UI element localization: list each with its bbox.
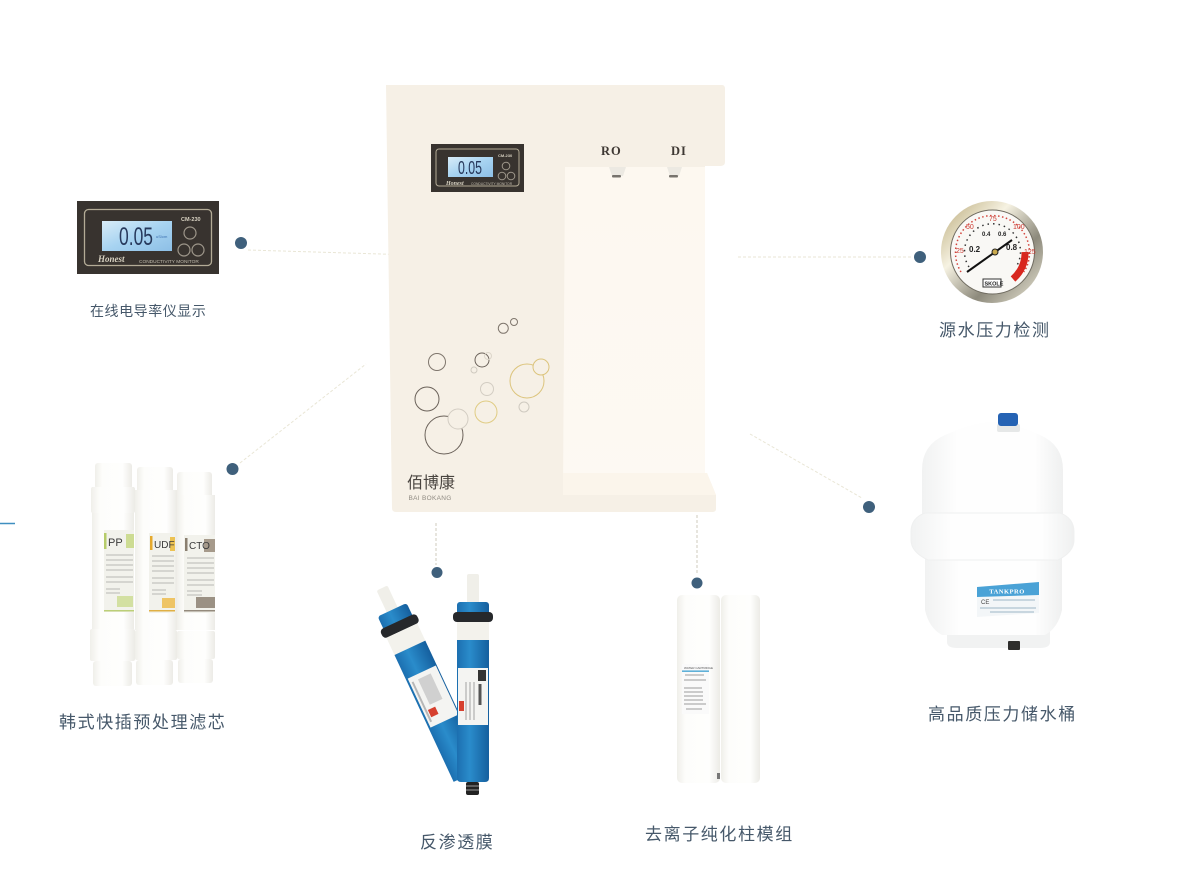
built-in conductivity monitor: 0.05 — [458, 158, 482, 178]
scale numbers: 0.8 — [1006, 243, 1018, 252]
outlet fitting — [1008, 641, 1020, 650]
RO outlet label: RO — [601, 144, 622, 158]
main water purifier unit — [386, 85, 725, 512]
CTO label — [184, 535, 215, 613]
base clip — [717, 773, 720, 779]
caption: membranes: 反渗透膜 — [420, 833, 494, 852]
buttons — [184, 227, 196, 239]
LCD display — [102, 221, 172, 251]
tank label — [977, 582, 1039, 617]
filter: UDF — [135, 467, 177, 685]
UDF label — [149, 533, 175, 613]
pressure gauge: 100 — [1013, 224, 1025, 231]
built-in conductivity monitor: CONDUCTIVITY MONITOR — [471, 182, 513, 186]
product label: WATER CARTRIDGE — [684, 666, 713, 670]
left column — [677, 595, 720, 783]
gauge bezel — [941, 201, 1043, 303]
pressure gauge: 50 — [966, 224, 974, 231]
red zone — [1013, 252, 1025, 279]
membrane: tilted — [364, 580, 487, 783]
tank dome — [922, 422, 1063, 515]
filter: PP — [90, 463, 135, 686]
conductivity monitor component: Honest — [97, 254, 125, 264]
outlet nozzles — [609, 167, 682, 178]
CTO label: CTO — [189, 541, 210, 552]
brand logo: BAI BOKANG — [408, 495, 452, 502]
pre-treatment filters — [90, 463, 215, 686]
conductivity monitor component: uS/cm — [156, 234, 168, 239]
filter: CTO — [177, 472, 215, 683]
bullet: DI module — [692, 578, 702, 588]
tank lower body — [925, 555, 1062, 635]
edge mark — [0, 522, 15, 524]
tank label: CE — [981, 600, 989, 606]
conductivity monitor component: 0.05 — [119, 223, 153, 251]
caption: tank: 高品质压力储水桶 — [928, 705, 1077, 724]
DI outlet label: DI — [671, 144, 687, 158]
scale numbers: 0.2 — [969, 245, 981, 254]
caption: monitor: 在线电导率仪显示 — [90, 303, 206, 319]
conductivity monitor component: CONDUCTIVITY MONITOR — [139, 259, 199, 265]
brand logo — [407, 474, 455, 502]
valve cap — [997, 413, 1020, 432]
built-in conductivity monitor: CM-230 — [498, 153, 513, 158]
conductivity monitor component: CM-230 — [181, 217, 201, 223]
product label — [682, 664, 713, 714]
bullet: tank — [863, 501, 875, 513]
PP label: PP — [108, 537, 123, 549]
membrane: upright — [453, 574, 493, 795]
pressure gauge — [941, 201, 1043, 303]
RO membranes — [364, 574, 493, 795]
built-in conductivity monitor — [431, 144, 524, 192]
bubble decoration — [415, 318, 549, 454]
brand plate — [983, 279, 1001, 287]
connector lines — [240, 250, 912, 575]
brand logo: 佰博康 — [407, 474, 455, 492]
scale numbers — [969, 232, 1018, 254]
caption: gauge: 源水压力检测 — [939, 321, 1051, 340]
pressure tank — [911, 413, 1074, 650]
DI module — [677, 595, 760, 783]
machine body — [386, 85, 725, 512]
bullet: membranes — [432, 567, 442, 578]
outer psi scale — [955, 216, 1030, 272]
bullet: filters — [226, 463, 238, 475]
pressure gauge: 75 — [989, 216, 997, 223]
caption: DI module: 去离子纯化柱模组 — [645, 825, 794, 844]
tank base — [947, 630, 1050, 648]
bullet: monitor — [235, 237, 247, 249]
needle — [967, 240, 1012, 272]
dispensing recess — [563, 167, 715, 495]
bullet: gauge — [914, 251, 926, 263]
built-in conductivity monitor: Honest — [445, 181, 464, 187]
scale numbers: 0.6 — [998, 232, 1007, 238]
UDF label: UDF — [154, 540, 175, 551]
tank label: TANKPRO — [989, 588, 1025, 596]
pressure gauge: 125 — [1024, 249, 1036, 256]
conductivity monitor component — [77, 201, 219, 274]
monitor panel — [77, 201, 219, 274]
caption: filters: 韩式快插预处理滤芯 — [59, 713, 226, 732]
pressure gauge: SKOLE — [984, 282, 1004, 288]
tank band — [911, 513, 1074, 560]
scale numbers: 0.4 — [982, 232, 991, 238]
PP label — [104, 530, 134, 612]
right column — [721, 595, 760, 783]
pressure gauge: 25 — [956, 248, 964, 255]
